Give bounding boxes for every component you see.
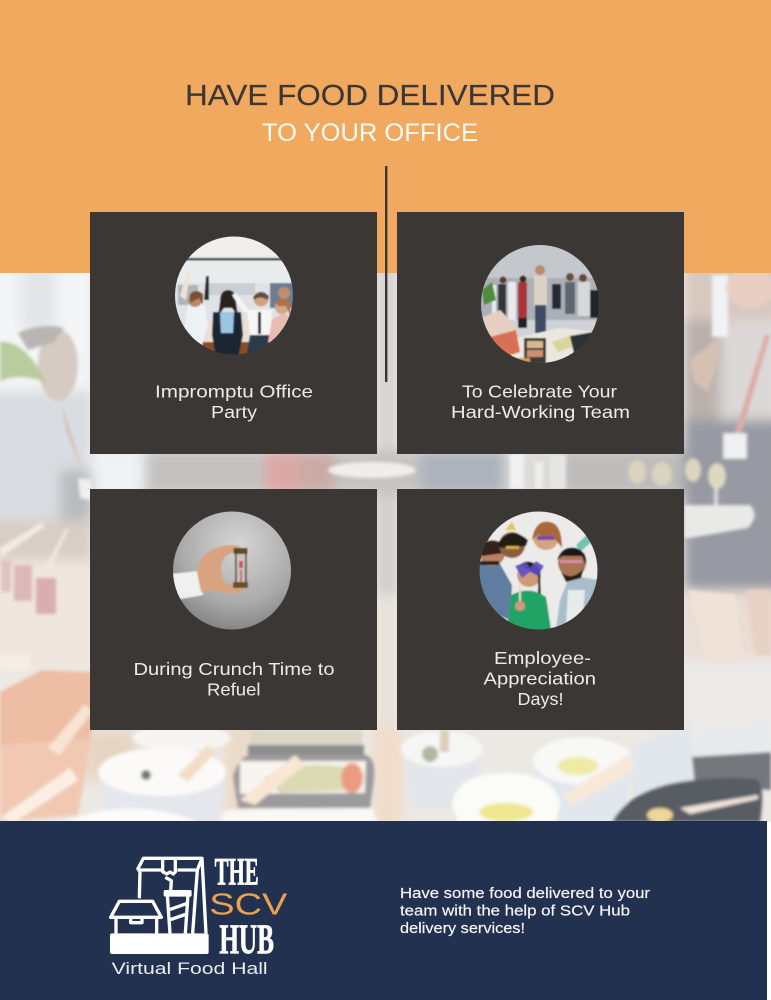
label: to celebrate your hard-working team: [451, 382, 630, 422]
logo wordmark: SCV: [209, 888, 288, 922]
heading: have food delivered: HAVE FOOD DELIVERED: [185, 80, 555, 112]
person at left: [38, 329, 78, 401]
footer text: Have some food delivered to your: [400, 885, 650, 902]
label: impromptu office party: [155, 382, 313, 422]
label: during crunch time to refuel: [134, 659, 334, 700]
peach serving trays: [0, 670, 92, 822]
label: employee appreciation days: Appreciation: [484, 668, 596, 688]
footer text: [400, 885, 650, 937]
icon: takeout bag, box and cup: [111, 858, 206, 933]
photo: team gathered around buffet: [481, 245, 599, 363]
stripes of standing guests: [510, 454, 524, 489]
label: during crunch time to refuel: During Crunch Time to: [134, 659, 334, 679]
photo: coworkers with party props: [480, 512, 598, 630]
footer text: delivery services!: [400, 920, 525, 937]
logo wordmark: THE: [215, 850, 259, 894]
label: impromptu office party: Party: [211, 402, 257, 422]
label: employee appreciation days: Employee-: [494, 648, 591, 668]
panel: during crunch time: [90, 489, 377, 730]
orange header band: [0, 0, 771, 273]
background photo: blurred office party and food: [0, 260, 771, 825]
footer band: [0, 821, 767, 1000]
title: [185, 80, 555, 147]
panel: celebrate your team: [397, 212, 684, 454]
photo: office team celebrating: [175, 236, 293, 354]
panel: impromptu office party: [90, 212, 377, 454]
label: during crunch time to refuel: Refuel: [207, 680, 260, 700]
panel: employee appreciation days: [397, 489, 684, 730]
drinks and skewers: [1, 560, 11, 592]
subheading: to your office: TO YOUR OFFICE: [262, 119, 478, 147]
rectangular tray: [233, 755, 374, 808]
label: impromptu office party: Impromptu Office: [155, 382, 313, 402]
logo base: [110, 933, 209, 954]
logo wordmark: [112, 850, 288, 978]
ramekins: [404, 758, 478, 806]
label: employee appreciation days: Days!: [518, 689, 564, 709]
label: employee appreciation days: [484, 648, 596, 709]
label: to celebrate your hard-working team: To Celebrate Your: [462, 382, 617, 402]
photo: hand holding hourglass: [173, 512, 291, 630]
logo: the scv hub virtual food hall: [110, 850, 288, 978]
footer text: team with the help of SCV Hub: [400, 902, 630, 920]
serving tray behind cards: [328, 462, 416, 478]
logo wordmark: Virtual Food Hall: [112, 959, 268, 978]
label: to celebrate your hard-working team: Hard-Working Team: [451, 402, 630, 422]
white bowls, left: [132, 730, 232, 750]
woman and glasses at right: [684, 505, 755, 538]
vertical divider line: [385, 166, 387, 382]
logo wordmark: HUB: [219, 916, 274, 963]
